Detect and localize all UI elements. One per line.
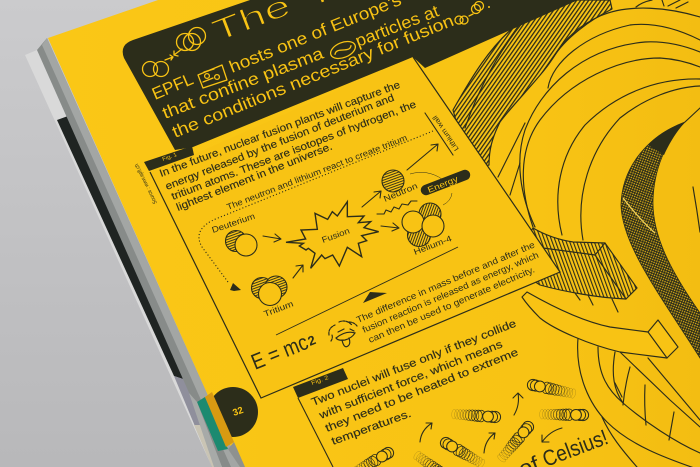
- page number: [208, 387, 258, 437]
- bar end edge: [648, 332, 667, 358]
- ring lines: [465, 0, 700, 240]
- divider with pointer: [276, 247, 458, 335]
- title: [208, 0, 338, 49]
- header text: the conditions necessary for fusion: [169, 11, 457, 142]
- lithium wall label: [425, 113, 461, 155]
- dark header panel: [123, 0, 578, 150]
- tritium: Tritium: [262, 298, 295, 319]
- arrow: deuterium to fusion: [263, 234, 281, 242]
- mass difference text: fusion reaction is released as energy, which: [361, 250, 540, 335]
- crescent solid tip: [648, 122, 685, 155]
- figure 1 intro text: In the future, nuclear fusion plants will capture the: [158, 79, 402, 180]
- deuterium: Deuterium: [210, 211, 256, 235]
- motion arrows: [420, 393, 562, 453]
- helium-4: Helium-4: [412, 233, 453, 257]
- arrow: fusion to helium: [381, 223, 399, 231]
- figure 1 intro text: [158, 79, 418, 214]
- moving nuclei: [348, 378, 589, 467]
- mass difference text: The difference in mass before and after the: [355, 240, 536, 325]
- tokamak illustration: [453, 0, 700, 467]
- mass difference text: [355, 240, 540, 345]
- crescent light line: [623, 198, 655, 233]
- icon: tokamak box: [198, 65, 227, 88]
- figure 2 text: Two nuclei will fuse only if they collide: [310, 318, 518, 409]
- dotted neutron loop: [199, 131, 433, 282]
- hatched block: [510, 228, 637, 299]
- icon: nuclei end of sentence: [455, 2, 490, 24]
- tritium: [252, 276, 295, 319]
- arrow: tritium to fusion: [293, 265, 303, 278]
- header text: particles at: [353, 1, 442, 51]
- neutron: [382, 170, 419, 204]
- fig 1 tab: [144, 146, 194, 171]
- deuterium: [210, 211, 257, 256]
- fig 1 label: Fig. 1: [162, 152, 178, 163]
- dotted arrowhead: [230, 283, 241, 291]
- figure 2 text: temperatures.: [330, 408, 413, 448]
- page number: 32: [231, 405, 245, 419]
- spine overlay strips: [189, 392, 245, 467]
- lower coils: [575, 293, 700, 467]
- figure 2 text: [310, 318, 520, 448]
- figure 2 tab: [293, 368, 348, 398]
- figure 1 panel: [144, 57, 560, 398]
- icon: deuterium and tritium colliding: [142, 28, 206, 76]
- hatched outer band: [453, 0, 612, 170]
- figure 1 intro text: tritium atoms. These are isotopes of hydrogen, the: [170, 98, 418, 203]
- lithium wall label: Lithium wall: [432, 113, 461, 152]
- figure 2 tab: Fig. 2: [311, 375, 330, 387]
- equation: E = mc: [248, 329, 312, 375]
- energy pill: Energy: [426, 173, 460, 195]
- neutron and lithium caption: The neutron and lithium react to create tritium: [225, 132, 409, 212]
- arrow: neutron to lithium wall: [407, 144, 438, 170]
- mass difference text: can then be used to generate electricity.: [367, 264, 536, 345]
- figure 1 intro text: energy released by the fusion of deuterium and: [164, 92, 396, 193]
- equation: 2: [306, 332, 318, 349]
- curved bar: [522, 292, 678, 358]
- icon: einstein face: [329, 321, 357, 347]
- energy zigzag: [377, 201, 417, 214]
- helium-4: [402, 203, 453, 257]
- book spine page stack: [25, 38, 240, 467]
- energy pill: [410, 172, 465, 205]
- title: The: [208, 0, 295, 49]
- neutron: Neutron: [382, 180, 419, 204]
- figure 2 text: they need to be heated to extreme: [324, 346, 520, 435]
- header text: that confine plasma: [160, 43, 327, 123]
- arrow: fusion to neutron: [362, 191, 381, 207]
- icon: plasma: [328, 38, 358, 62]
- temperature text: [515, 424, 611, 467]
- fusion starburst: [286, 202, 379, 268]
- fusion starburst: Fusion: [320, 225, 351, 245]
- block edges: [543, 243, 626, 299]
- figure 2 text: with sufficient force, which means: [317, 338, 505, 422]
- source credit: Source : www.epfl.ch: [134, 163, 159, 205]
- figure 2 left rule: [298, 398, 333, 467]
- figure 1 intro text: lightest element in the universe.: [175, 141, 334, 214]
- halftone crescent: [621, 122, 700, 358]
- header text: hosts one of Europe's: [226, 0, 404, 77]
- header text: [149, 0, 457, 142]
- header text: EPFL: [149, 69, 196, 104]
